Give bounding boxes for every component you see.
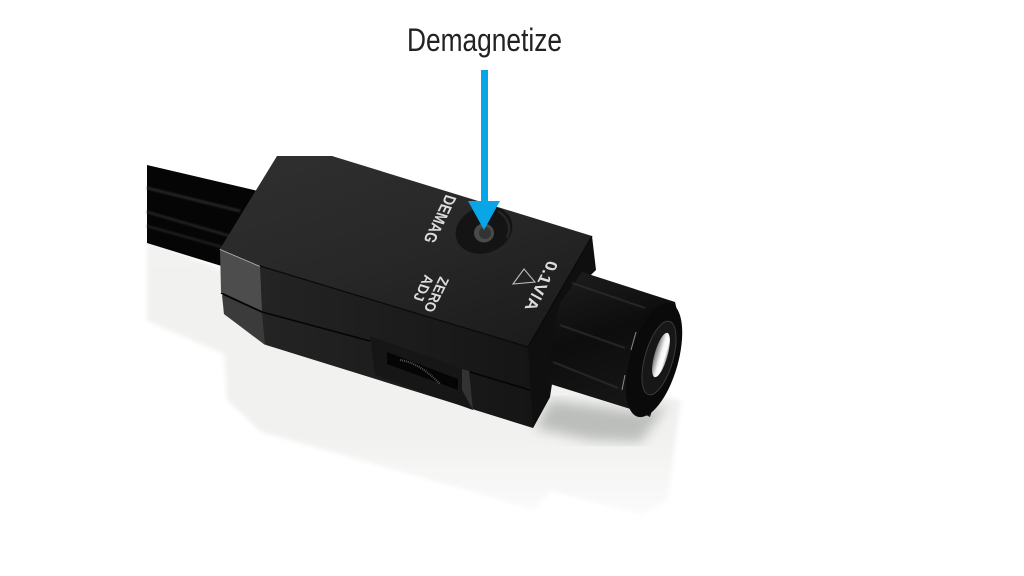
cable bundle xyxy=(147,165,258,268)
connector housing xyxy=(220,156,596,428)
cap ridges xyxy=(553,283,645,388)
connector opening xyxy=(635,318,683,398)
left chamfer lower xyxy=(222,295,265,345)
cap collar xyxy=(547,272,680,417)
housing front side xyxy=(220,249,550,428)
housing end face xyxy=(528,236,596,428)
chamfer highlight xyxy=(220,249,260,266)
shadow under connector xyxy=(535,400,668,442)
icon: warning triangle xyxy=(513,269,535,284)
cap rim xyxy=(615,297,693,423)
connector lens xyxy=(648,331,674,379)
housing top face xyxy=(220,156,592,347)
label: ADJ: ADJ xyxy=(409,273,436,303)
demag button xyxy=(449,198,519,262)
label: 0.1V/A: 0.1V/A xyxy=(520,259,561,313)
left chamfer upper xyxy=(220,249,262,311)
groove highlight xyxy=(622,332,636,390)
top edge line xyxy=(260,236,592,347)
label: DEMAG: DEMAG xyxy=(419,193,460,245)
arrow: pointing to demag button xyxy=(468,70,500,230)
BNC connector cap xyxy=(547,272,693,423)
reflection on the white surface xyxy=(147,240,681,514)
title: Demagnetize: Demagnetize xyxy=(407,22,562,58)
housing seam xyxy=(221,293,530,390)
label: ZERO: ZERO xyxy=(419,275,451,314)
zero adjust slot xyxy=(370,336,473,410)
